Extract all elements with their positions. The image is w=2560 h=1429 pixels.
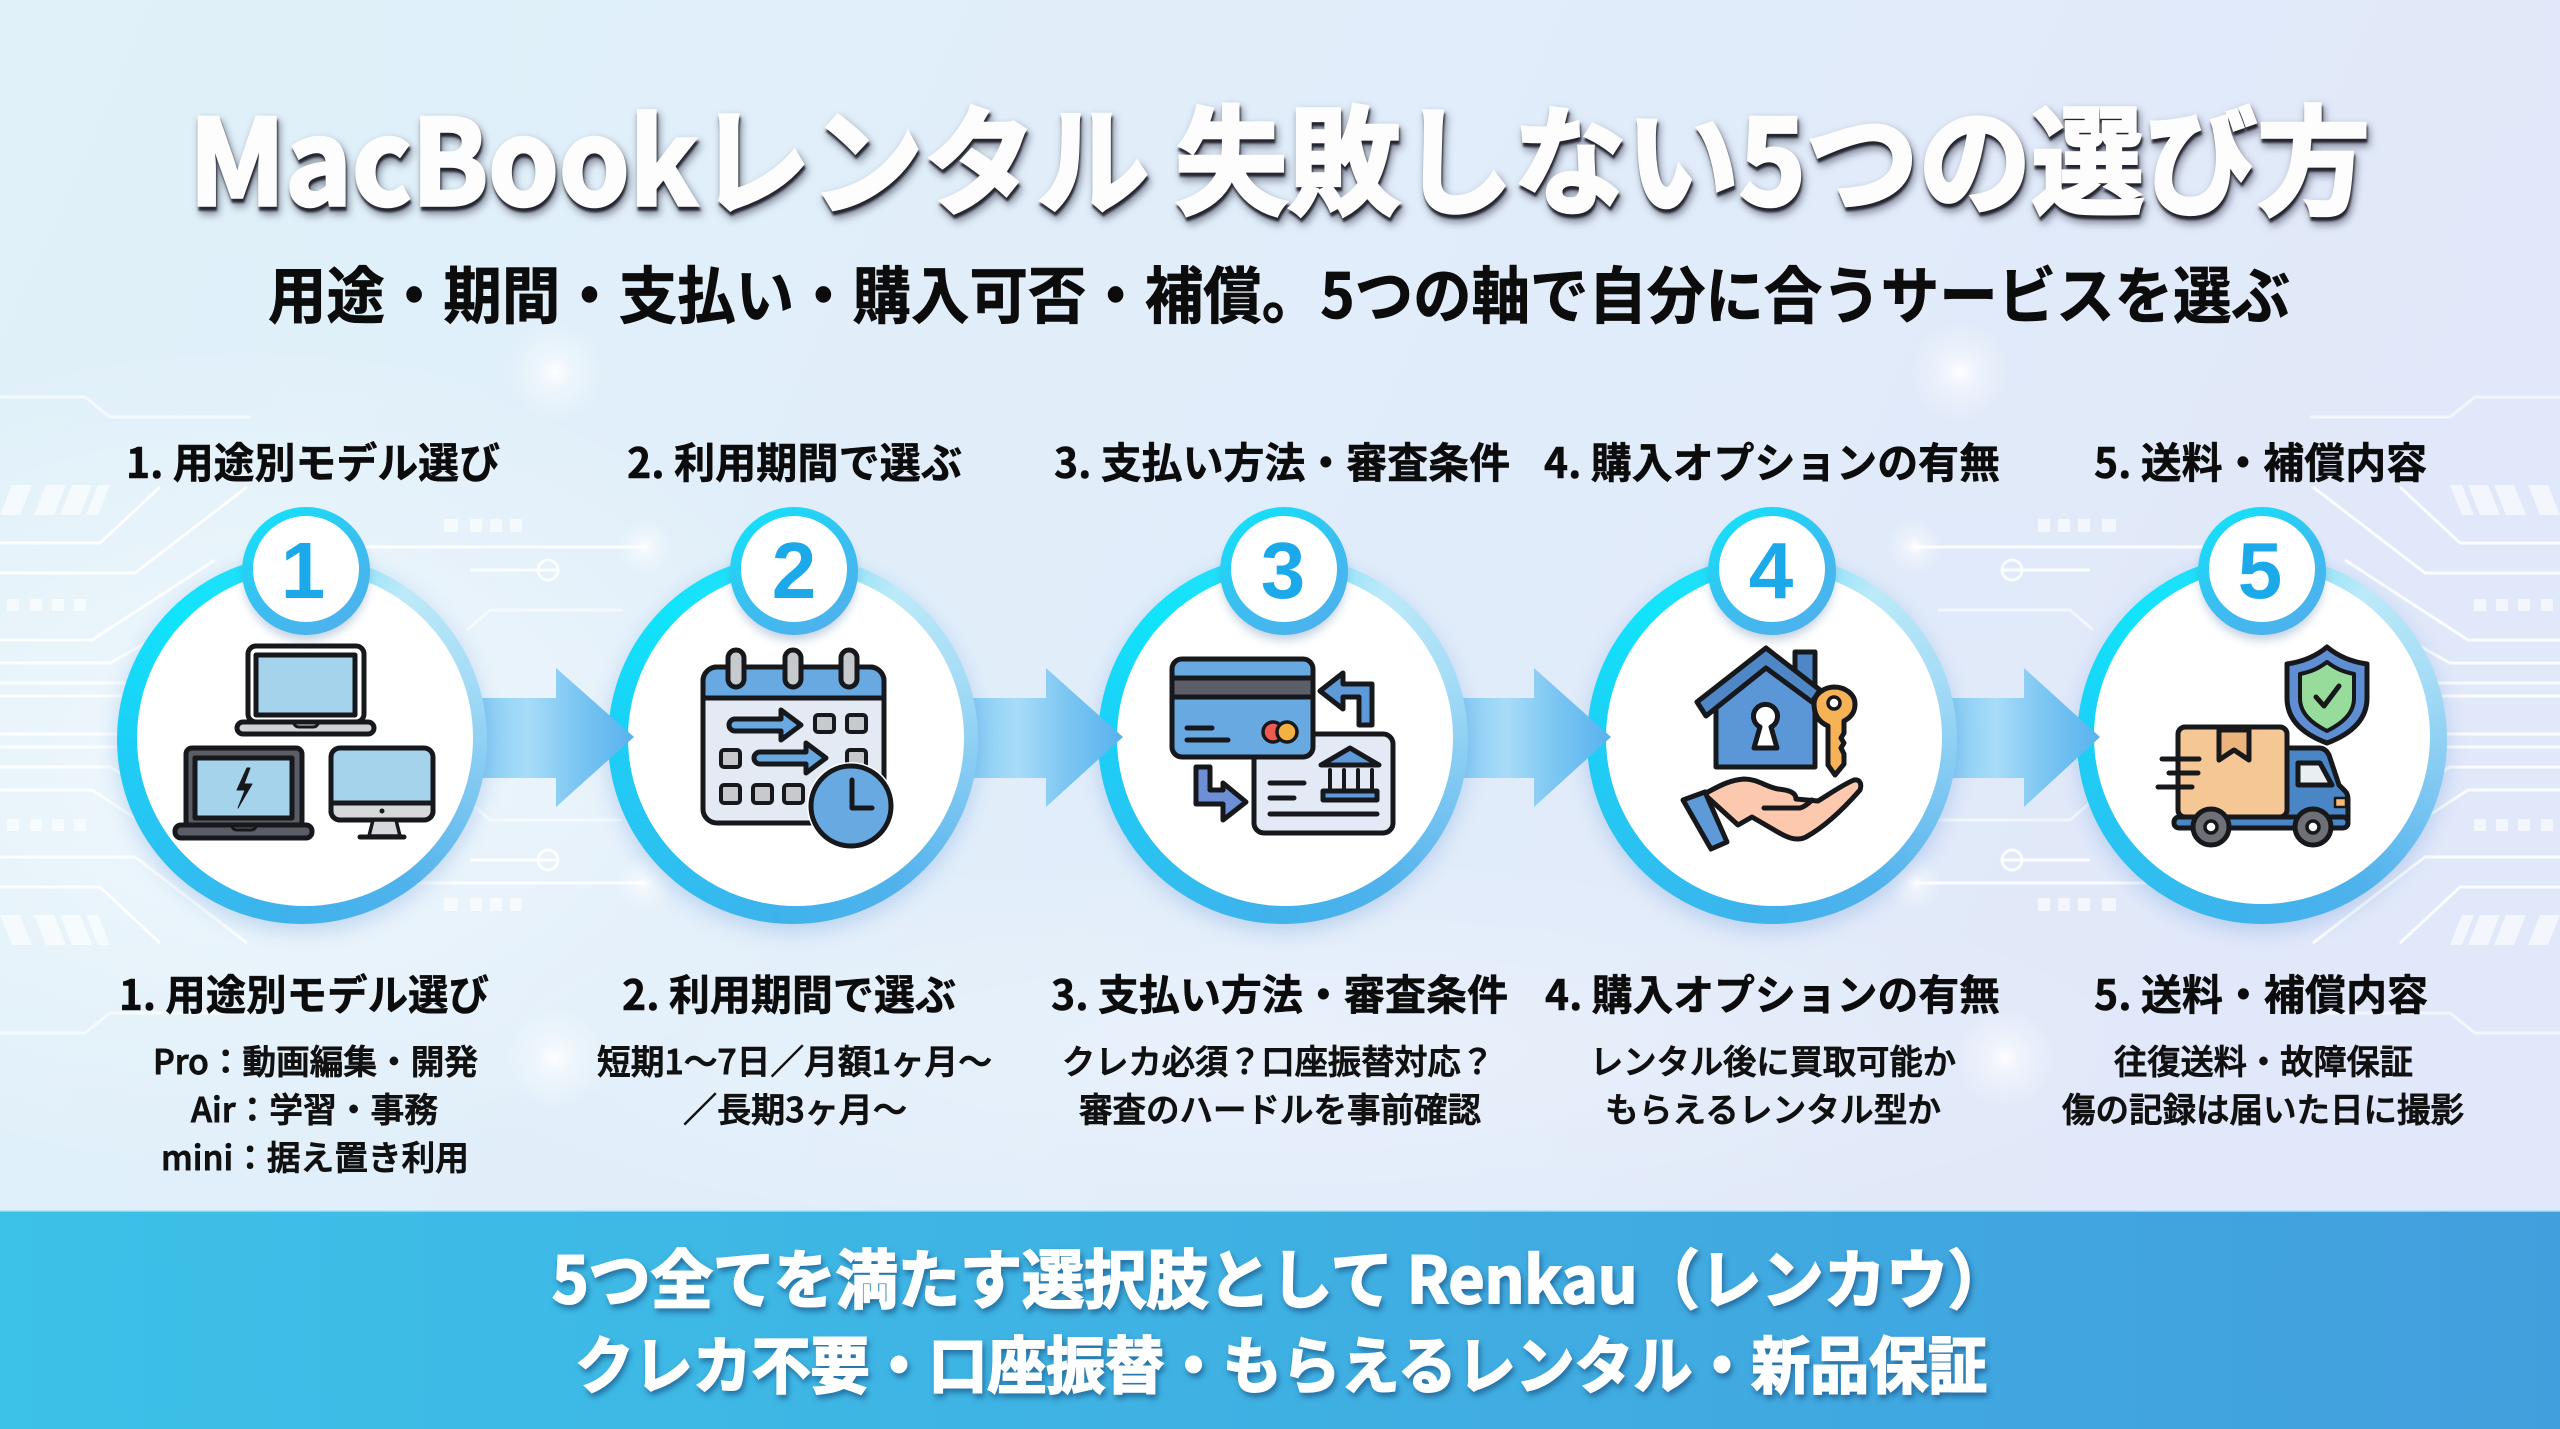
panel: bottom call-to-action band: [0, 1210, 2560, 1429]
text block: step 4: レンタル後に買取可能か: [1590, 1035, 1956, 1084]
badge: number 3: 3: [1261, 526, 1305, 615]
text block: step 4: [1545, 962, 2000, 1132]
text block: step 4: もらえるレンタル型か: [1605, 1083, 1941, 1132]
heading row: top step labels: 3. 支払い方法・審査条件: [1054, 430, 1510, 491]
text block: step 3: [1051, 962, 1508, 1132]
heading row: top step labels: 5. 送料・補償内容: [2094, 430, 2427, 491]
badge: number 2: [730, 507, 858, 640]
panel: step 5 circle: [2076, 507, 2448, 932]
panel: step 4 circle: [1586, 507, 1958, 932]
heading row: top step labels: [126, 430, 2427, 491]
text block: step 1: 1. 用途別モデル選び: [119, 962, 489, 1023]
arrow: step 4 to 5: [1940, 668, 2100, 807]
heading row: top step labels: 2. 利用期間で選ぶ: [627, 430, 962, 491]
text block: step 3: 審査のハードルを事前確認: [1079, 1083, 1481, 1132]
title: MacBookレンタル 失敗しない5つの選び方: [189, 68, 2370, 239]
text block: step 3: 3. 支払い方法・審査条件: [1051, 962, 1508, 1023]
icon: house key and hand: [1683, 648, 1861, 849]
text block: step 2: [597, 962, 992, 1132]
icon: MacBook Pro, Air and mini: [175, 646, 433, 838]
text block: step 1: mini：据え置き利用: [161, 1131, 469, 1180]
callout line 1: 5つ全てを満たす選択肢として Renkau（レンカウ）: [552, 1230, 2010, 1322]
badge: number 4: [1708, 507, 1836, 640]
badge: number 2: 2: [772, 526, 816, 615]
text block: step 5: 往復送料・故障保証: [2114, 1035, 2413, 1084]
arrow: step 2 to 3: [960, 668, 1123, 807]
arrow: step 3 to 4: [1450, 668, 1611, 807]
subtitle: 用途・期間・支払い・購入可否・補償。5つの軸で自分に合うサービスを選ぶ: [268, 246, 2290, 336]
text block: step 2: 短期1〜7日／月額1ヶ月〜: [597, 1035, 992, 1084]
badge: number 1: [242, 507, 370, 640]
callout line 2: クレカ不要・口座振替・もらえるレンタル・新品保証: [575, 1316, 1987, 1406]
text block: step 2: ／長期3ヶ月〜: [683, 1083, 907, 1132]
text block: step 2: 2. 利用期間で選ぶ: [622, 962, 956, 1023]
badge: number 3: [1220, 507, 1348, 640]
text block: step 5: 5. 送料・補償内容: [2094, 962, 2428, 1023]
badge: number 1: 1: [281, 526, 325, 615]
text block: step 5: [2062, 962, 2464, 1132]
heading row: top step labels: 4. 購入オプションの有無: [1544, 430, 2000, 491]
badge: number 4: 4: [1749, 526, 1794, 615]
text block: step 4: 4. 購入オプションの有無: [1545, 962, 2000, 1023]
panel: step 1 circle: [116, 507, 488, 932]
icon: credit card and bank transfer: [1172, 659, 1393, 833]
text block: step 3: クレカ必須？口座振替対応？: [1062, 1035, 1494, 1084]
icon: delivery truck with shield: [2158, 647, 2367, 845]
arrow: step 1 to 2: [470, 668, 634, 807]
text block: step 5: 傷の記録は届いた日に撮影: [2062, 1083, 2464, 1132]
panel: step 2 circle: [607, 507, 979, 932]
badge: number 5: [2198, 507, 2326, 640]
text block: step 1: Air：学習・事務: [191, 1083, 438, 1132]
icon: calendar with clock: [703, 650, 895, 850]
text block: step 1: [119, 962, 489, 1180]
badge: number 5: 5: [2238, 526, 2282, 615]
panel: step 3 circle: [1097, 507, 1469, 932]
text block: step 1: Pro：動画編集・開発: [153, 1035, 478, 1084]
heading row: top step labels: 1. 用途別モデル選び: [126, 430, 500, 491]
